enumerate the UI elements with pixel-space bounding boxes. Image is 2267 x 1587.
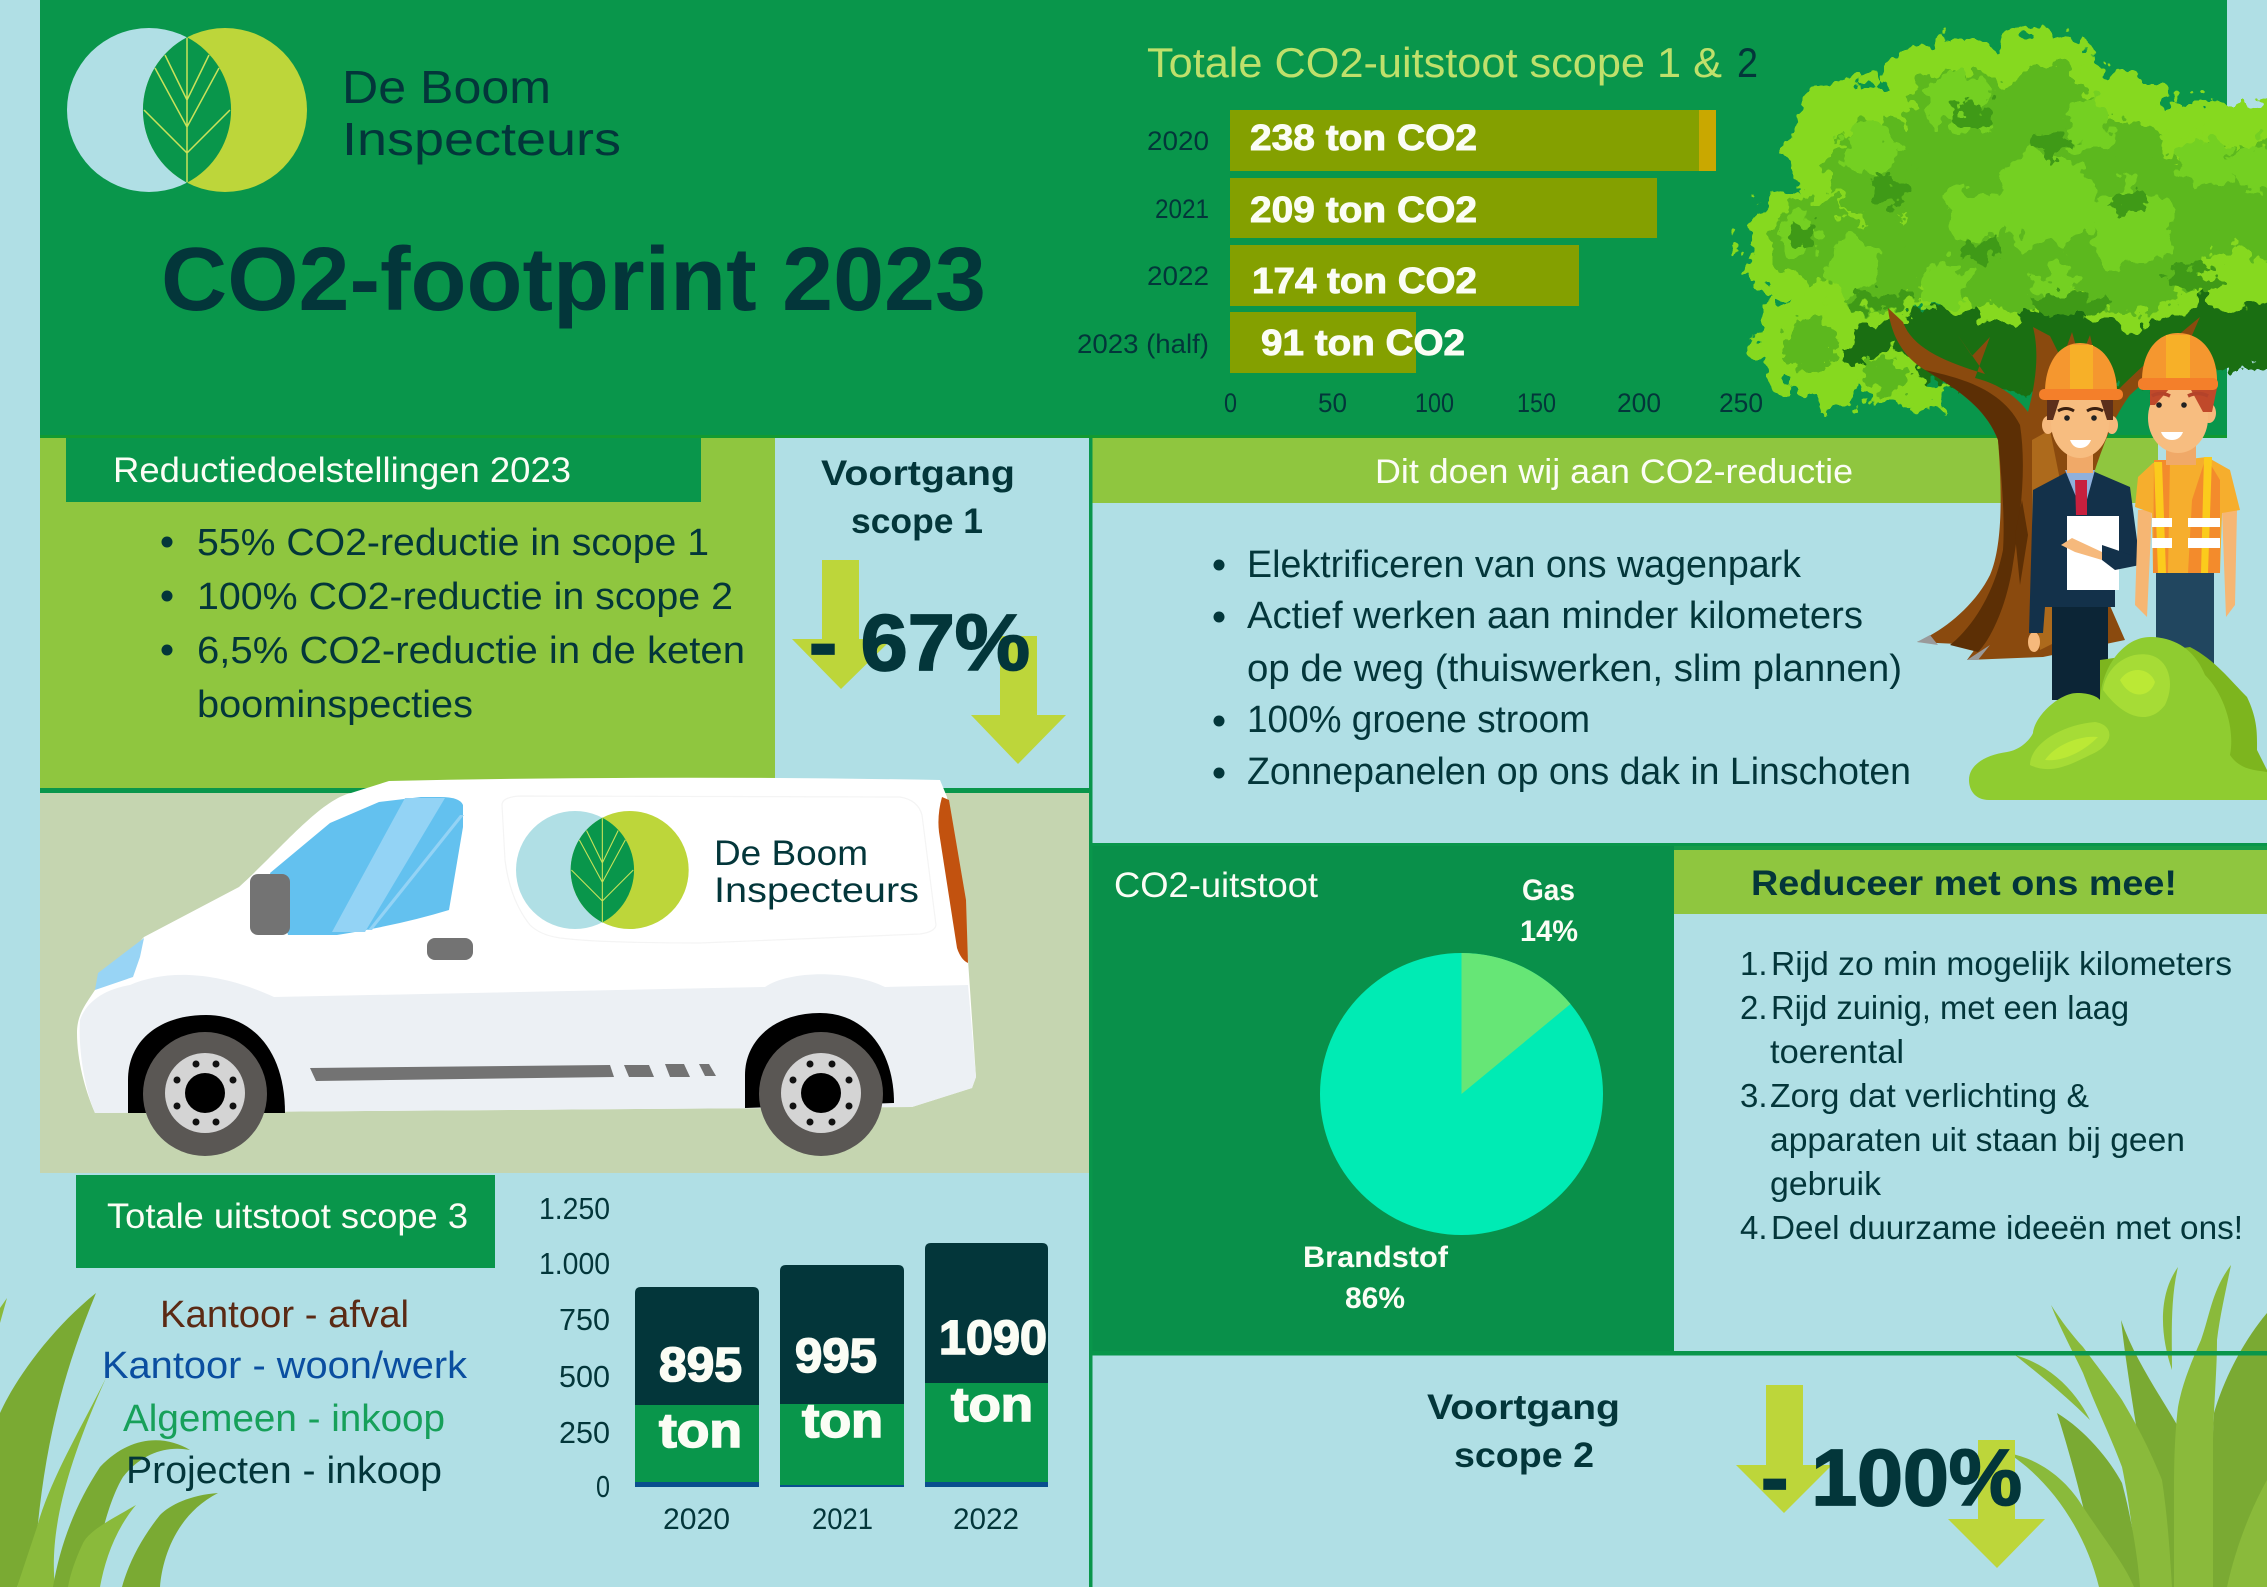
pie chart — [1320, 953, 1603, 1235]
bar chart: scope 1 and 2 — [1077, 39, 1763, 418]
arms — [2135, 510, 2237, 617]
van logo: De Boom — [714, 834, 868, 873]
heading: voortgang scope 2: scope 2 — [1454, 1436, 1594, 1475]
trunk — [1888, 308, 2200, 660]
list: reduction targets: 6,5% CO2-reductie in de keten — [197, 630, 745, 672]
list: reduction targets: 55% CO2-reductie in scope 1 — [197, 522, 709, 564]
numbered list: Deel duurzame ideeën met ons! — [1771, 1209, 2243, 1246]
canopy shadow — [1810, 270, 2267, 393]
bar chart: scope 1 and 2: 250 — [1719, 388, 1763, 418]
bar chart: scope 1 and 2: 2023 (half) — [1077, 329, 1209, 359]
arm — [2061, 538, 2140, 570]
head — [2148, 383, 2217, 465]
panel: van background — [40, 793, 1089, 1173]
y axis: 1.250 — [539, 1191, 610, 1226]
bar 2021 — [780, 1265, 904, 1536]
bar 2021: 995 — [795, 1330, 877, 1383]
numbered list: 4. — [1740, 1209, 1768, 1246]
grass: bottom right — [2008, 1265, 2267, 1587]
safety vest — [2152, 457, 2220, 573]
door handle — [427, 938, 473, 960]
numbered list: 2. — [1740, 989, 1768, 1026]
trousers — [2052, 605, 2108, 700]
side stripes — [310, 1064, 716, 1081]
left hand — [2028, 632, 2040, 652]
shirt and tie — [2065, 470, 2095, 515]
jeans — [2156, 570, 2214, 674]
mirror — [250, 874, 290, 935]
title: CO2-footprint 2023 — [161, 230, 986, 330]
bar chart: scope 1 and 2: 0 — [1224, 388, 1237, 418]
illustration: man with vest — [2135, 333, 2240, 674]
panel: what we do heading bar: Dit doen wij aan CO2-reductie — [1375, 453, 1853, 491]
bar chart: scope 1 and 2: 100 — [1415, 388, 1454, 418]
label: brandstof: Brandstof — [1303, 1241, 1449, 1274]
heading bar: reduction targets: Reductiedoelstellingen 2023 — [113, 451, 571, 490]
icon: arrow down right — [971, 636, 1066, 764]
y axis: 0 — [596, 1469, 610, 1504]
bar chart: scope 1 and 2: 50 — [1318, 388, 1347, 418]
logo: De Boom Inspecteurs — [67, 28, 621, 192]
panel: what we do heading bar — [1091, 438, 2158, 503]
heading: scope 3 — [76, 1175, 495, 1268]
label: gas: 14% — [1520, 915, 1578, 948]
list: what we do: 100% groene stroom — [1247, 699, 1590, 741]
heading bar: reduction targets — [66, 438, 701, 502]
helmet — [2138, 333, 2218, 390]
numbered list: apparaten uit staan bij geen — [1770, 1121, 2185, 1158]
bar 2022: 2022 — [953, 1503, 1019, 1536]
bar chart: scope 1 and 2: 2022 — [1147, 261, 1209, 291]
window — [270, 797, 464, 935]
illustration: man in suit — [2028, 343, 2140, 700]
van logo — [516, 811, 919, 929]
y axis — [539, 1191, 610, 1504]
heading: voortgang scope 1: Voortgang — [821, 454, 1015, 493]
panel: header — [40, 0, 2227, 438]
lower body — [80, 974, 976, 1113]
bar chart: scope 1 and 2: 2020 — [1147, 126, 1209, 156]
y axis: 750 — [559, 1302, 610, 1337]
y axis: 250 — [559, 1415, 610, 1450]
front wheel — [128, 1015, 285, 1156]
heading: CO2-uitstoot: CO2-uitstoot — [1114, 866, 1318, 905]
illustration: bush — [1969, 637, 2267, 800]
van sticker — [502, 796, 936, 943]
numbered list: toerental — [1770, 1033, 1904, 1070]
label: brandstof: 86% — [1345, 1282, 1405, 1315]
numbered list: gebruik — [1770, 1165, 1882, 1202]
helmet — [2039, 343, 2123, 400]
van body — [77, 778, 976, 1113]
numbered list: Rijd zo min mogelijk kilometers — [1771, 945, 2232, 982]
bar 2022: ton — [951, 1379, 1033, 1432]
icon: arrow down right — [1948, 1440, 2045, 1568]
panel: reduce with us — [1674, 845, 2267, 1246]
canopy bright — [1743, 30, 2267, 413]
bar chart: scope 1 and 2: 238 ton CO2 — [1250, 117, 1477, 158]
bar 2020: ton — [659, 1405, 742, 1458]
legend: scope 3: Algemeen - inkoop — [123, 1398, 445, 1440]
rear wheel — [745, 1013, 894, 1156]
heading: voortgang scope 1 — [821, 454, 1015, 541]
list: reduction targets: boominspecties — [197, 684, 473, 726]
label: gas — [1520, 874, 1578, 948]
bar 2021: ton — [802, 1395, 883, 1448]
list: what we do: Zonnepanelen op ons dak in Linschoten — [1247, 751, 1911, 793]
bar chart: scope 1 and 2: 209 ton CO2 — [1250, 189, 1477, 230]
numbered list: 3. — [1740, 1077, 1768, 1114]
bar chart: scope 1 and 2: 174 ton CO2 — [1252, 260, 1477, 301]
rear light — [938, 797, 968, 963]
bar 2022: 1090 — [939, 1312, 1047, 1365]
numbered list: 1. — [1740, 945, 1768, 982]
bar 2020: 895 — [659, 1339, 742, 1392]
headlight — [95, 938, 144, 990]
canopy dark patches — [1789, 99, 2225, 317]
illustration: tree — [1743, 30, 2267, 660]
numbered list: Rijd zuinig, met een laag — [1771, 989, 2129, 1026]
bar 2021: 2021 — [812, 1503, 873, 1536]
list: what we do: Actief werken aan minder kilometers — [1247, 595, 1863, 637]
bar 2020: 2020 — [663, 1503, 730, 1536]
illustration: van — [77, 778, 976, 1156]
bar chart: scope 1 and 2: 150 — [1517, 388, 1556, 418]
legend: scope 3 — [102, 1294, 468, 1492]
list: what we do: op de weg (thuiswerken, slim plannen) — [1247, 648, 1902, 690]
icon: arrow down left — [792, 560, 892, 689]
bar 2020 — [635, 1287, 759, 1536]
canopy mid — [1773, 63, 2267, 393]
bar 2022 — [925, 1243, 1048, 1536]
jacket — [2029, 472, 2140, 633]
chart title: 2 — [1737, 39, 1758, 86]
grass: bottom left — [0, 1293, 218, 1587]
heading: scope 3: Totale uitstoot scope 3 — [107, 1197, 468, 1236]
numbered list — [1740, 945, 2243, 1246]
panel: scope 2 progress — [1427, 1385, 2045, 1568]
paper — [2067, 516, 2119, 590]
panel: scope 1 progress — [792, 454, 1066, 764]
value: minus 67 percent: - 67% — [809, 598, 1030, 687]
heading: voortgang scope 1: scope 1 — [851, 502, 983, 541]
heading: reduceer met ons mee: Reduceer met ons mee! — [1751, 864, 2177, 903]
heading: voortgang scope 2: Voortgang — [1427, 1388, 1620, 1427]
list: what we do: Elektrificeren van ons wagenpark — [1247, 544, 1802, 586]
canopy highlights — [1780, 70, 2267, 307]
list: reduction targets: 100% CO2-reductie in scope 2 — [197, 576, 733, 618]
legend: scope 3: Projecten - inkoop — [126, 1450, 442, 1492]
bar chart: scope 3 — [539, 1191, 1048, 1536]
list: reduction targets — [162, 522, 745, 726]
head — [2042, 388, 2118, 473]
y axis: 500 — [559, 1359, 610, 1394]
van logo: Inspecteurs — [714, 871, 919, 910]
value: minus 100 percent: - 100% — [1761, 1433, 2022, 1522]
icon: arrow down left — [1736, 1385, 1832, 1513]
logo: De Boom Inspecteurs: De Boom — [342, 61, 551, 113]
numbered list: Zorg dat verlichting & — [1770, 1077, 2089, 1114]
legend: scope 3: Kantoor - woon/werk — [102, 1345, 468, 1387]
chart title: Totale CO2-uitstoot scope 1 & — [1147, 39, 1722, 86]
shirt — [2135, 457, 2240, 573]
legend: scope 3: Kantoor - afval — [160, 1294, 409, 1336]
list: what we do — [1214, 544, 1911, 793]
label: gas: Gas — [1522, 874, 1575, 907]
label: brandstof — [1303, 1241, 1449, 1315]
bar chart: scope 1 and 2: 91 ton CO2 — [1261, 322, 1465, 363]
panel: reduction targets — [40, 438, 775, 790]
bar chart: scope 1 and 2: 2021 — [1155, 194, 1209, 224]
y axis: 1.000 — [539, 1246, 610, 1281]
heading: voortgang scope 2 — [1427, 1388, 1620, 1475]
logo: De Boom Inspecteurs: Inspecteurs — [342, 113, 621, 165]
panel: CO2 emissions pie — [1091, 845, 1674, 1355]
bar chart: scope 1 and 2: 200 — [1617, 388, 1661, 418]
